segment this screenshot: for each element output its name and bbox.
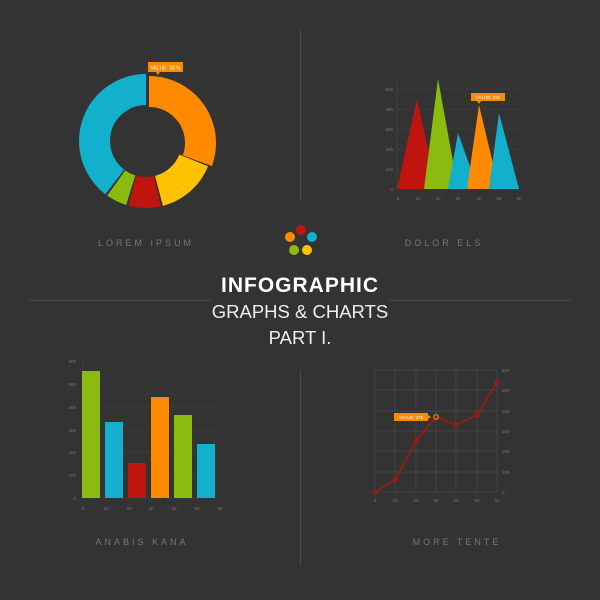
triangle chart: 20 — [435, 196, 441, 201]
line chart: 10 — [392, 498, 398, 503]
title — [212, 274, 388, 348]
bar chart: 0 — [82, 506, 85, 511]
bar chart: 30 — [148, 506, 154, 511]
bar chart: 40 — [171, 506, 177, 511]
line callout: VALUE: 375 — [399, 415, 424, 420]
triangle chart: 0 — [397, 196, 400, 201]
triangle chart: 50 — [496, 196, 502, 201]
line chart: 100 — [502, 470, 510, 475]
label: anabis kana: ANABIS KANA — [95, 537, 189, 547]
donut callout: VALUE: 28 % — [150, 66, 181, 72]
triangle chart: 60 — [516, 196, 522, 201]
triangle chart: 0 — [390, 187, 393, 192]
bar chart: 100 — [68, 473, 76, 478]
line chart: 20 — [413, 498, 419, 503]
line chart: 0 — [502, 490, 505, 495]
bar chart: 50 — [194, 506, 200, 511]
bar chart: 400 — [68, 405, 76, 410]
bar chart: 600 — [68, 359, 76, 364]
bar chart: 500 — [68, 382, 76, 387]
line chart: 30 — [433, 498, 439, 503]
line chart: 300 — [502, 429, 510, 434]
triangle chart: 100 — [385, 167, 393, 172]
bar chart: 300 — [68, 428, 76, 433]
label: dolor els: DOLOR ELS — [405, 238, 483, 248]
bar chart: 10 — [103, 506, 109, 511]
bar chart: 60 — [217, 506, 223, 511]
line chart: 400 — [502, 409, 510, 414]
label: more tente: MORE TENTE — [413, 537, 501, 547]
triangle chart: 30 — [455, 196, 461, 201]
triangle chart: 10 — [415, 196, 421, 201]
triangle chart: 300 — [385, 127, 393, 132]
triangle chart: 40 — [476, 196, 482, 201]
line chart: 40 — [453, 498, 459, 503]
donut chart — [94, 62, 200, 194]
line chart: 600 — [502, 368, 510, 373]
line chart: 60 — [494, 498, 500, 503]
triangle chart: 200 — [385, 147, 393, 152]
title: INFOGRAPHIC — [221, 274, 379, 297]
line chart — [373, 368, 510, 503]
bar chart — [68, 359, 223, 511]
line chart: 200 — [502, 449, 510, 454]
triangle chart — [385, 79, 522, 201]
bar chart: 0 — [73, 496, 76, 501]
title: GRAPHS & CHARTS — [212, 301, 388, 322]
label: lorem ipsum: LOREM IPSUM — [98, 238, 194, 248]
triangle chart: 400 — [385, 107, 393, 112]
triangle chart: 500 — [385, 87, 393, 92]
center icon: dots — [285, 225, 317, 255]
title: PART I. — [269, 327, 331, 348]
bar chart: 20 — [126, 506, 132, 511]
bar chart: 200 — [68, 450, 76, 455]
line chart: 0 — [374, 498, 377, 503]
line chart: 50 — [474, 498, 480, 503]
line chart: 500 — [502, 388, 510, 393]
triangle callout: VALUE: 421 — [476, 95, 501, 100]
